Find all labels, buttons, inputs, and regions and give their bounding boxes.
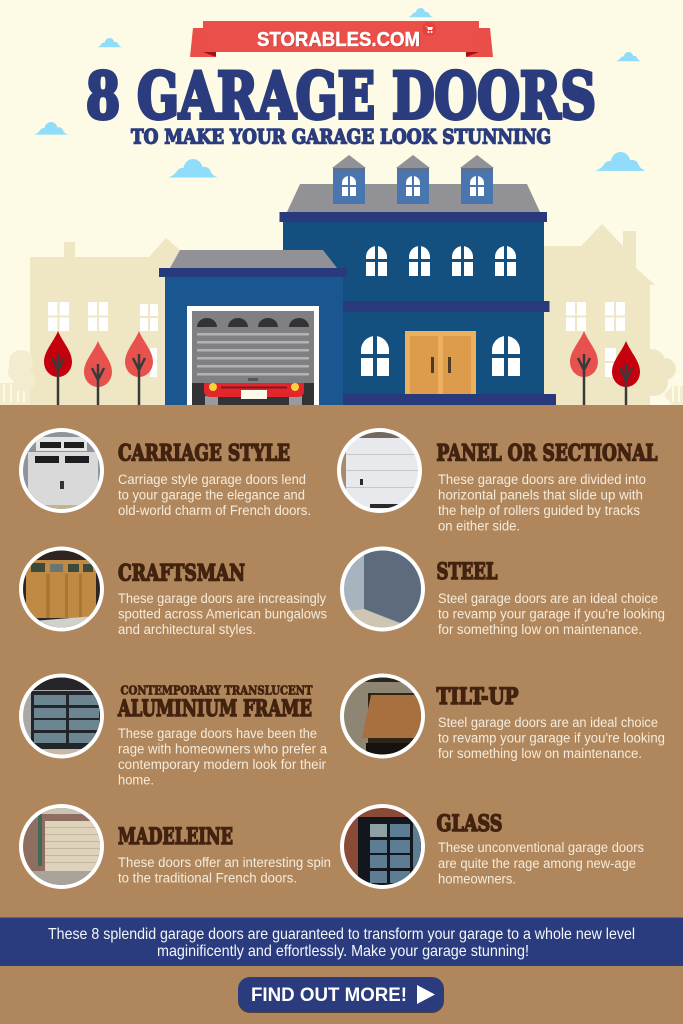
panel: glass [340,804,644,890]
panel: craftsman: These garage doors are increasingly [118,591,326,606]
panel: contemporary translucent aluminium frame: These garage doors have been the [118,726,317,741]
panel: madeleine [19,804,331,890]
panel: glass: homeowners. [438,872,516,886]
dormers [332,155,494,204]
car [204,383,304,405]
panel: contemporary translucent aluminium frame: CONTEMPORARY TRANSLUCENT [120,684,313,698]
footer band [0,918,683,966]
panel: glass: GLASS [436,811,502,837]
photo: craftsman door [19,546,104,632]
panel: glass: are quite the rage among new-age [438,856,636,871]
banner: storables.com: STORABLES.COM [257,29,420,51]
panel: carriage style: CARRIAGE STYLE [118,440,290,466]
panel: panel or sectional: horizontal panels that slide up with [438,488,643,502]
photo: tilt-up door [340,674,426,758]
subtitle: TO MAKE YOUR GARAGE LOOK STUNNING [131,124,551,148]
panel: panel or sectional: on either side. [438,518,520,534]
panel: glass: These unconventional garage doors [438,840,644,855]
photo: carriage door [19,428,104,513]
trees [44,331,640,405]
panel: craftsman: CRAFTSMAN [118,560,245,586]
icon: cart [422,22,436,36]
button: find out more [238,977,444,1013]
photo: steel door [340,546,426,633]
panel: madeleine: to the traditional French doors. [118,870,297,886]
banner: storables.com [190,21,493,57]
panel: tilt-up: to revamp your garage if you're looking [438,730,665,746]
panel: madeleine: These doors offer an interesting spin [118,855,331,870]
button: find out more: FIND OUT MORE! [251,985,407,1006]
upper windows [366,246,516,276]
roof [287,184,540,212]
panel: tilt-up: Steel garage doors are an ideal choice [438,715,658,730]
panel: steel [340,546,665,637]
icon: play arrow [417,985,435,1004]
panel: tilt-up: TILT-UP [436,684,519,710]
panel: steel: STEEL [436,559,498,585]
photo: sectional door [337,428,424,514]
photo: aluminium door [19,674,104,758]
main house [280,155,556,405]
photo: glass door [340,804,426,890]
panel: contemporary translucent aluminium frame: contemporary modern look for their [118,757,326,772]
footer band: maginificently and effortlessly. Make your garage stunning! [157,943,529,960]
house body [283,222,544,397]
panel: tilt-up [340,674,665,761]
panel: steel: Steel garage doors are an ideal choice [438,591,658,606]
panel: carriage style: old-world charm of French doors. [118,503,311,518]
panel: tilt-up: for something low on maintenance. [438,746,642,761]
panel: carriage style: to your garage the elegance and [118,488,305,502]
background house left [0,238,180,405]
panel: panel or sectional [337,428,658,534]
garage [159,250,347,405]
panel: craftsman [19,546,327,637]
panel: craftsman: spotted across American bungalows [118,606,327,622]
panel: panel or sectional: the help of rollers guided by tracks [438,503,640,518]
panel: contemporary translucent aluminium frame [19,674,327,788]
panel: carriage style: Carriage style garage doors lend [118,472,306,487]
banner: storables.com: STORABLES.COM [258,30,421,52]
panel: contemporary translucent aluminium frame: home. [118,772,154,788]
panel: contemporary translucent aluminium frame: ALUMINIUM FRAME [117,696,312,722]
panel: craftsman: and architectural styles. [118,622,256,637]
panel: steel: to revamp your garage if you're looking [438,606,665,622]
front door [405,331,476,394]
panel: madeleine: MADELEINE [118,824,233,850]
panel: contemporary translucent aluminium frame: rage with homeowners who prefer a [118,742,327,756]
photo: madeleine door [19,804,104,890]
clouds [34,8,646,178]
background house right [544,224,683,405]
panel: steel: for something low on maintenance. [438,622,642,637]
lower windows [361,336,520,376]
panel: panel or sectional: These garage doors are divided into [438,472,646,487]
panel: carriage style [19,428,311,518]
